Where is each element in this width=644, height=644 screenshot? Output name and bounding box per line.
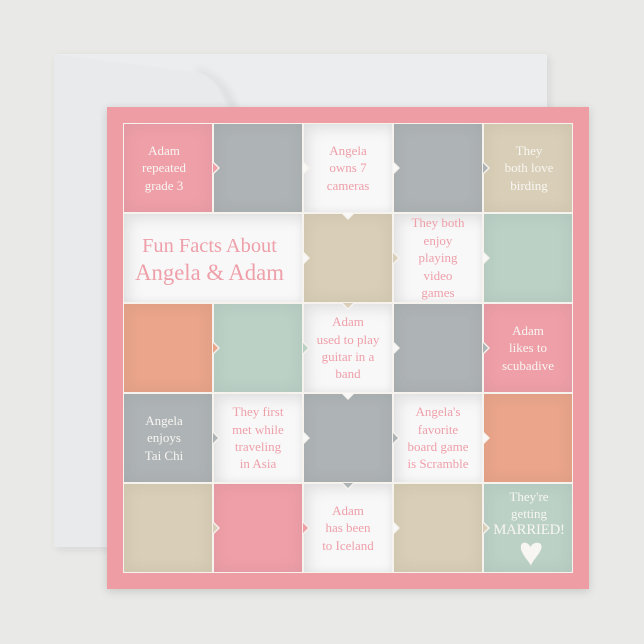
- tile: Angela owns 7 cameras: [304, 124, 392, 212]
- tile: gray r3c4: [394, 304, 482, 392]
- tile: They both love birding: birding: [510, 178, 548, 193]
- tile: gray r4c3: [304, 394, 392, 482]
- tile: Angela's favorite board game is Scramble: [394, 394, 482, 482]
- grid background: [123, 123, 573, 573]
- tile: Adam likes to scubadive: scubadive: [502, 358, 554, 373]
- tile: Angela enjoys Tai Chi: [124, 394, 212, 482]
- tile: Angela enjoys Tai Chi: Angela: [145, 413, 183, 428]
- tile: They're getting MARRIED: [484, 484, 572, 572]
- tile: Adam used to play guitar in a band: used to play: [317, 332, 379, 347]
- tile: Angela owns 7 cameras: Angela: [329, 143, 367, 158]
- tile: Adam used to play guitar in a band: band: [335, 366, 361, 381]
- card: [107, 107, 589, 589]
- tile: They first met while traveling in Asia: They first: [233, 404, 283, 419]
- tile: Adam has been to Iceland: to Iceland: [322, 538, 374, 553]
- tile: Angela enjoys Tai Chi: Tai Chi: [145, 448, 183, 463]
- tile: They both enjoy playing video games: video: [424, 268, 452, 283]
- icon: heart: [520, 542, 542, 566]
- tile: They're getting MARRIED: MARRIED!: [493, 522, 565, 538]
- tile: They're getting MARRIED: They're: [509, 489, 549, 504]
- tile: Angela's favorite board game is Scramble: is Scramble: [407, 456, 468, 471]
- tile: They both enjoy playing video games: They both: [411, 215, 465, 230]
- tile: Adam used to play guitar in a band: [304, 304, 392, 392]
- tile: tan r5c1: [124, 484, 212, 572]
- tile: Adam likes to scubadive: Adam: [512, 323, 544, 338]
- tile: Angela owns 7 cameras: cameras: [327, 178, 369, 193]
- tile: tan r5c4: [394, 484, 482, 572]
- tile: Angela's favorite board game is Scramble: favorite: [418, 422, 458, 437]
- tile: Adam likes to scubadive: likes to: [509, 340, 547, 355]
- tile: They both enjoy playing video games: playing: [418, 250, 457, 265]
- tile: Adam likes to scubadive: [484, 304, 572, 392]
- tile: They both love birding: [484, 124, 572, 212]
- tile: They first met while traveling in Asia: met while: [232, 422, 284, 437]
- tile: mint r2c5: [484, 214, 572, 302]
- tile: They both love birding: They: [516, 143, 542, 158]
- tile: Adam has been to Iceland: Adam: [332, 503, 364, 518]
- tile: They both enjoy playing video games: [394, 214, 482, 302]
- tile: gray r1c2: [214, 124, 302, 212]
- tile: orange r4c5: [484, 394, 572, 482]
- tile: tan r2c3: [304, 214, 392, 302]
- tile: Adam repeated grade 3: grade 3: [145, 178, 183, 193]
- tile: They first met while traveling in Asia: [214, 394, 302, 482]
- tile: They both enjoy playing video games: games: [421, 285, 455, 300]
- tile: Adam has been to Iceland: [304, 484, 392, 572]
- title: [124, 214, 302, 302]
- tile: Adam repeated grade 3: Adam: [148, 143, 180, 158]
- tile: They both enjoy playing video games: enjoy: [424, 233, 452, 248]
- tile: Angela owns 7 cameras: owns 7: [329, 160, 367, 175]
- tile: Adam used to play guitar in a band: guitar in a: [322, 349, 374, 364]
- tile: Adam repeated grade 3: repeated: [142, 160, 186, 175]
- tile: They first met while traveling in Asia: traveling: [235, 439, 281, 454]
- title: Angela & Adam: [135, 260, 284, 285]
- tile: They both love birding: both love: [505, 160, 553, 175]
- tile: gray r1c4: [394, 124, 482, 212]
- tile: Angela's favorite board game is Scramble: Angela's: [416, 404, 460, 419]
- tile: Adam used to play guitar in a band: Adam: [332, 314, 364, 329]
- tile: Angela enjoys Tai Chi: enjoys: [147, 430, 181, 445]
- tile: Adam repeated grade 3: [124, 124, 212, 212]
- tile: Adam has been to Iceland: has been: [325, 520, 371, 535]
- tile: pink r5c2: [214, 484, 302, 572]
- title: Fun Facts About: [142, 235, 277, 257]
- tile: Angela's favorite board game is Scramble: board game: [407, 439, 468, 454]
- tile: They're getting MARRIED: getting: [511, 506, 547, 521]
- tile: mint r3c2: [214, 304, 302, 392]
- tile: They first met while traveling in Asia: in Asia: [240, 456, 276, 471]
- tile: orange r3c1: [124, 304, 212, 392]
